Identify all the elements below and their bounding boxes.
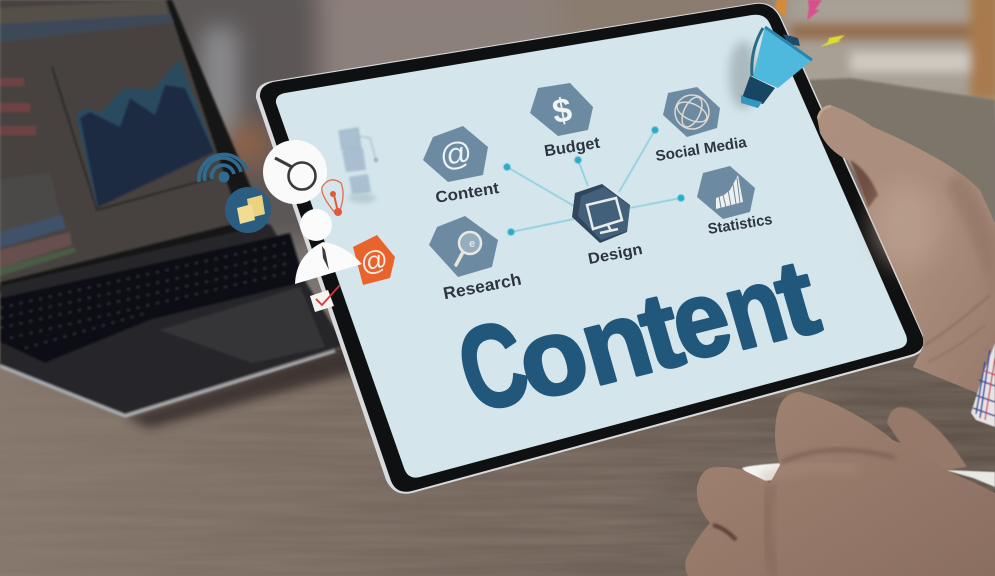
icon: check box <box>310 285 340 312</box>
big title: Content: n <box>567 276 664 408</box>
icon: person <box>295 209 362 284</box>
connector lines <box>507 130 681 232</box>
laptop lid and screen <box>0 0 268 292</box>
big title: Content: C <box>444 296 542 438</box>
tablet screen <box>276 15 907 478</box>
big title: Content: e <box>657 254 743 384</box>
tablet <box>256 3 925 494</box>
shirt cuff <box>971 343 995 427</box>
connector dots <box>504 126 684 236</box>
node: Content <box>423 126 501 207</box>
laptop base and keyboard <box>0 224 345 416</box>
icon: light bulb <box>322 180 343 216</box>
node: Budget: $ <box>550 91 575 131</box>
node: Design: Design <box>587 241 644 268</box>
node: Design <box>572 184 644 268</box>
stylus <box>742 463 995 487</box>
node: Budget: Budget <box>543 135 602 160</box>
node: Social Media: Social Media <box>654 134 748 165</box>
icon: orange at badge <box>353 235 395 285</box>
icon: wifi signal <box>199 154 247 182</box>
node: Social Media <box>654 87 748 165</box>
icon: orange at badge: @ <box>358 244 390 278</box>
big title: Content: n <box>710 242 798 372</box>
hand: lower, holding stylus <box>685 392 995 576</box>
laptop <box>0 0 400 428</box>
node: Content: Content <box>434 180 501 207</box>
node: Research: Research <box>442 270 523 303</box>
table surface <box>0 300 995 576</box>
icon: megaphone with sparks <box>729 0 845 109</box>
laptop shadow <box>125 345 400 428</box>
icon: blurred document list <box>339 128 378 203</box>
gray object behind hand <box>805 78 995 230</box>
tablet bezel <box>256 3 925 494</box>
node: Budget <box>530 83 602 160</box>
big title: Content: o <box>503 291 601 423</box>
node: Statistics <box>697 166 774 238</box>
big title: Content: t <box>762 235 830 360</box>
hand: right, holding tablet <box>817 105 995 393</box>
node: Research <box>429 216 523 303</box>
icon: magnifier badge <box>263 140 327 204</box>
icon: folders badge <box>225 187 271 233</box>
laptop area chart <box>76 60 214 207</box>
node: Statistics: Statistics <box>707 211 774 238</box>
node: Research: e <box>469 238 475 250</box>
big title: Content: t <box>626 268 694 393</box>
node: Content: @ <box>437 133 475 175</box>
